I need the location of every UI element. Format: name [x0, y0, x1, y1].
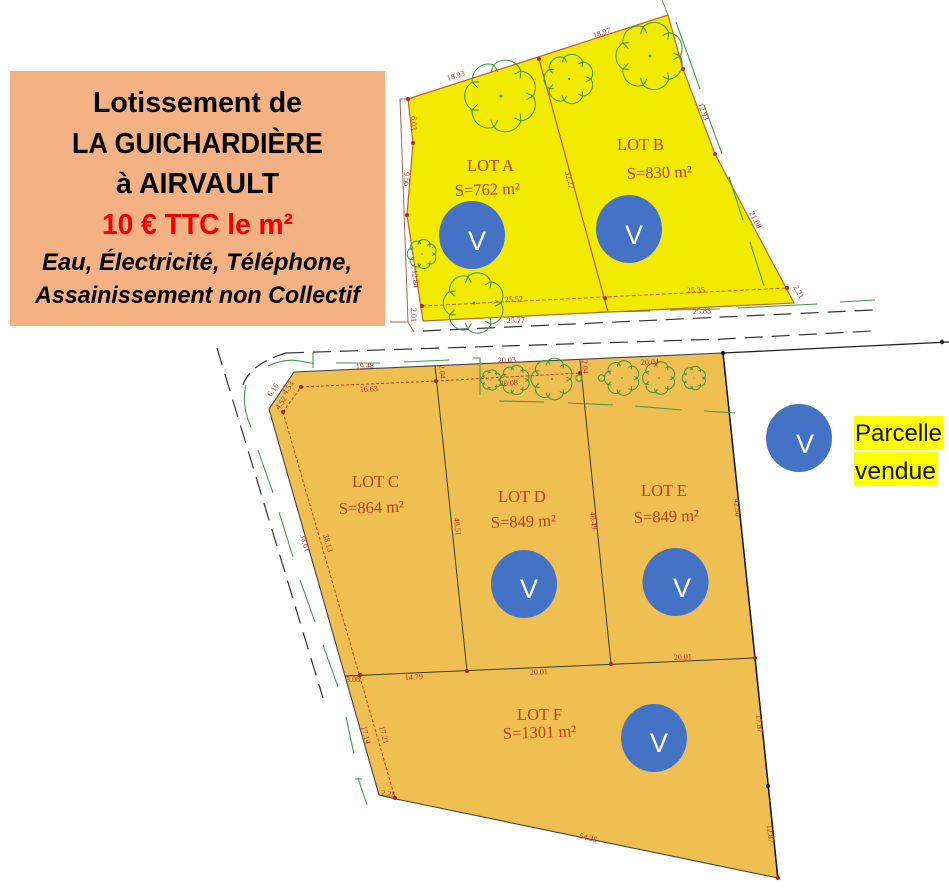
dimensions lower plot: 2.04 — [580, 359, 590, 374]
title panel — [10, 71, 385, 326]
legend highlight — [854, 416, 943, 486]
dimensions lower plot: 2.25 — [381, 788, 396, 799]
label lot B — [617, 135, 692, 183]
panel background — [10, 71, 385, 326]
dimensions A B: 25.35 — [687, 285, 705, 295]
dimensions lower plot: 14.79 — [405, 672, 423, 682]
sold marker lot D — [491, 550, 557, 618]
label lot B: LOT B — [617, 135, 664, 154]
legend text: vendue — [855, 458, 936, 485]
trees along the road — [481, 358, 705, 400]
dimensions A B: 18.97 — [592, 26, 612, 40]
sold marker lot B — [596, 195, 662, 263]
dimensions A B: 12.84 — [410, 269, 421, 288]
dimensions A B: 18.93 — [446, 69, 466, 83]
legend marker — [766, 404, 832, 472]
heading line 3: à AIRVAULT — [116, 168, 279, 200]
label lot A: S=762 m² — [454, 179, 520, 200]
green lines A B — [600, 22, 875, 312]
heading line 1: Lotissement de — [93, 87, 302, 119]
dimensions lower plot: 12.87 — [765, 824, 776, 843]
legend: sold parcel — [766, 404, 943, 486]
dimensions A B: 25.83 — [693, 306, 711, 316]
label lot C: S=864 m² — [338, 497, 404, 518]
lots C to F orange shape — [269, 353, 778, 878]
dimensions A B: 6.03 — [409, 116, 418, 130]
sold marker lot B: V — [625, 220, 643, 250]
dimensions A B: 32.27 — [563, 170, 576, 190]
dimensions lower plot: 54.25 — [579, 831, 598, 844]
label lot E: LOT E — [641, 481, 687, 500]
label lot D: LOT D — [498, 487, 546, 506]
upper plot: lots A and B — [402, 15, 875, 333]
dashed setback line — [422, 288, 787, 306]
dimensions A B: 2.21 — [791, 284, 806, 300]
label lot E — [633, 481, 699, 527]
label lot C — [338, 472, 404, 518]
sold marker lot D: V — [520, 574, 538, 604]
lot dividers — [345, 360, 755, 676]
divider between A and B — [539, 59, 608, 312]
sold marker lot E — [642, 548, 708, 616]
dimensions lower plot: 4.52 — [273, 395, 289, 411]
dimensions lower plot: 20.01 — [674, 652, 692, 662]
lots A and B yellow shape — [407, 15, 794, 321]
dimensions lower plot: 3.06 — [346, 675, 360, 684]
label lot F: S=1301 m² — [502, 721, 577, 743]
sold marker lot E: V — [673, 573, 691, 603]
label lot F — [502, 705, 577, 743]
dimensions A B: 12.93 — [696, 102, 711, 122]
dimensions lower plot: 20.08 — [500, 378, 518, 388]
sold marker lot F — [621, 704, 687, 772]
legend text: Parcelle — [855, 420, 942, 447]
label lot A: LOT A — [467, 156, 514, 175]
sold marker lot F: V — [650, 728, 668, 758]
green lines lower plot — [244, 352, 735, 805]
label lot E: S=849 m² — [633, 506, 699, 527]
dimensions lower plot: 20.03 — [498, 355, 516, 365]
dimensions A B — [402, 26, 806, 325]
dimensions A B: 25.52 — [505, 294, 523, 304]
dimensions lower plot: 6.16 — [265, 382, 281, 398]
label lot B: S=830 m² — [626, 162, 692, 183]
dimensions A B: 2.01 — [409, 308, 418, 322]
dimensions lower plot: 20.01 — [530, 667, 548, 677]
services line 1: Eau, Électricité, Téléphone, — [42, 248, 352, 276]
trees on lots A and B — [407, 22, 682, 333]
label lot A — [454, 156, 520, 200]
sold marker lot A: V — [468, 226, 486, 256]
dimensions A B: 21.08 — [747, 210, 764, 230]
dimensions lower plot: 17.14 — [359, 725, 373, 745]
dimensions A B: 25.77 — [507, 315, 525, 325]
dimensions lower plot: 19.48 — [356, 361, 374, 371]
legend text — [855, 420, 942, 485]
dimensions lower plot: 16.63 — [360, 384, 378, 394]
dimensions lower plot: 42.50 — [732, 498, 743, 517]
dimensions A B: 9.56 — [402, 172, 411, 186]
survey markers A B — [405, 57, 789, 308]
survey markers C to F — [281, 351, 780, 880]
heading line 2: LA GUICHARDIÈRE — [72, 126, 323, 160]
services line 2: Assainissement non Collectif — [34, 282, 362, 309]
dimensions lower plot: 17.21 — [377, 725, 391, 745]
dashed setback lines — [283, 373, 580, 798]
label lot F: LOT F — [517, 705, 562, 724]
lower plot: lots C to F — [244, 351, 780, 880]
dimensions lower plot: 40.51 — [452, 517, 463, 536]
dimensions lower plot: 17.87 — [754, 714, 765, 733]
road outlines — [217, 0, 949, 698]
dimensions lower plot: 38.13 — [321, 533, 335, 553]
price: 10 € TTC le m² — [102, 209, 293, 241]
label lot C: LOT C — [352, 472, 399, 491]
label lot D: S=849 m² — [490, 511, 556, 532]
dimensions lower plot: 20.04 — [641, 357, 659, 367]
dimensions lower plot: 2.04 — [437, 364, 447, 379]
dimensions lower plot: 40.49 — [588, 511, 599, 530]
label lot D — [490, 487, 556, 532]
dimensions lower plot — [265, 355, 776, 844]
dimensions lower plot: 4.53 — [280, 380, 296, 396]
dimensions lower plot: 38.61 — [298, 533, 312, 553]
legend marker: V — [796, 429, 814, 459]
sold marker lot A — [439, 201, 505, 269]
